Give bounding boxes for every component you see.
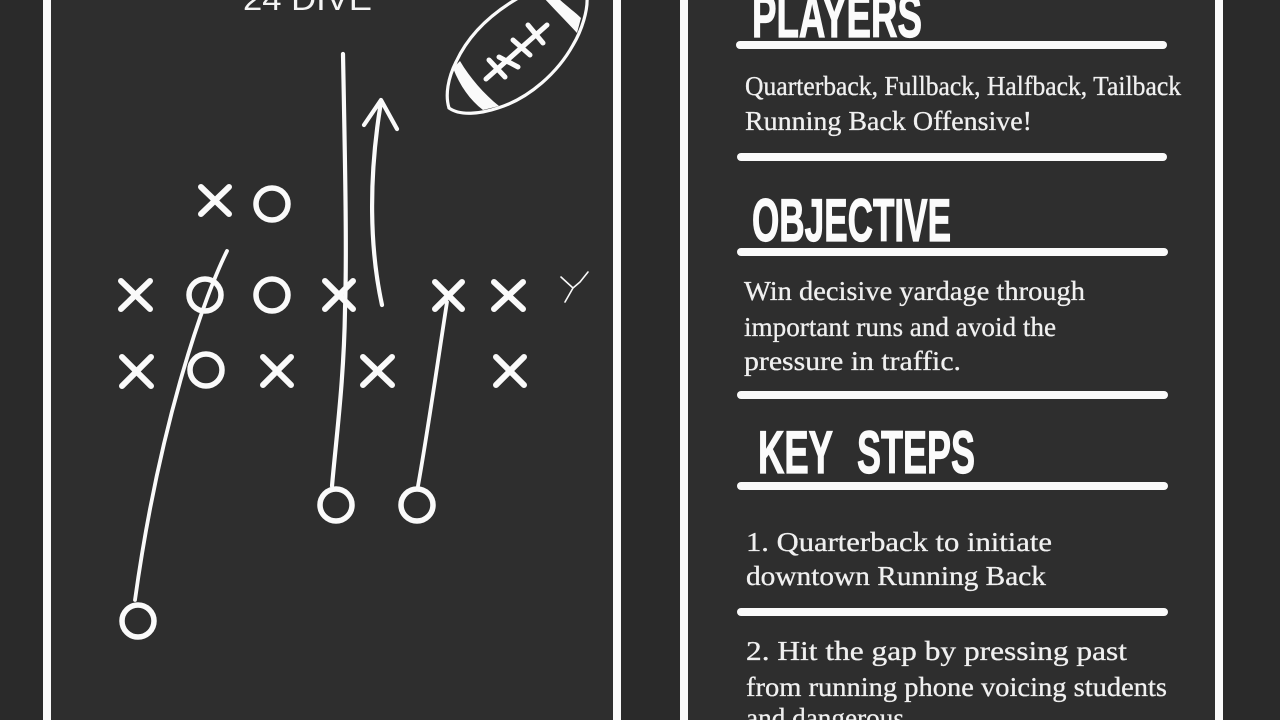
objective text: important runs and avoid the <box>744 312 1056 342</box>
formation: O marks <box>122 188 433 637</box>
icon: football <box>447 0 587 113</box>
divider between steps <box>737 608 1168 616</box>
panel: play diagram <box>47 0 617 720</box>
step 1 text: 1. Quarterback to initiate <box>746 527 1052 557</box>
objective text <box>744 276 1086 376</box>
players text: Running Back Offensive! <box>745 106 1032 136</box>
divider after objective text <box>737 391 1168 399</box>
divider under players heading <box>736 41 1167 49</box>
step 1 text: downtown Running Back <box>746 561 1047 591</box>
heading: objective: OBJECTIVE <box>752 187 951 254</box>
divider after players text <box>737 153 1167 161</box>
step 2 text <box>746 636 1167 720</box>
heading: key steps: KEY <box>758 419 833 486</box>
divider under objective heading <box>737 248 1168 256</box>
panel: play details <box>684 0 1219 720</box>
route: long vertical line <box>332 54 346 486</box>
route: right line <box>418 302 447 486</box>
players text: Quarterback, Fullback, Halfback, Tailback <box>745 71 1181 101</box>
heading: key steps <box>758 419 975 486</box>
route: left diagonal line <box>135 251 227 600</box>
step 2 text: from running phone voicing students <box>746 672 1167 702</box>
step 1 text <box>746 527 1052 591</box>
divider under key steps heading <box>737 482 1168 490</box>
small chalk scribble mark <box>561 272 588 302</box>
objective text: pressure in traffic. <box>744 346 961 376</box>
formation: X marks <box>121 187 524 386</box>
heading: key steps: STEPS <box>857 419 975 486</box>
players text <box>745 71 1181 136</box>
step 2 text: 2. Hit the gap by pressing past <box>746 636 1128 666</box>
objective text: Win decisive yardage through <box>744 276 1086 306</box>
arrow: curved upward route <box>364 100 397 305</box>
